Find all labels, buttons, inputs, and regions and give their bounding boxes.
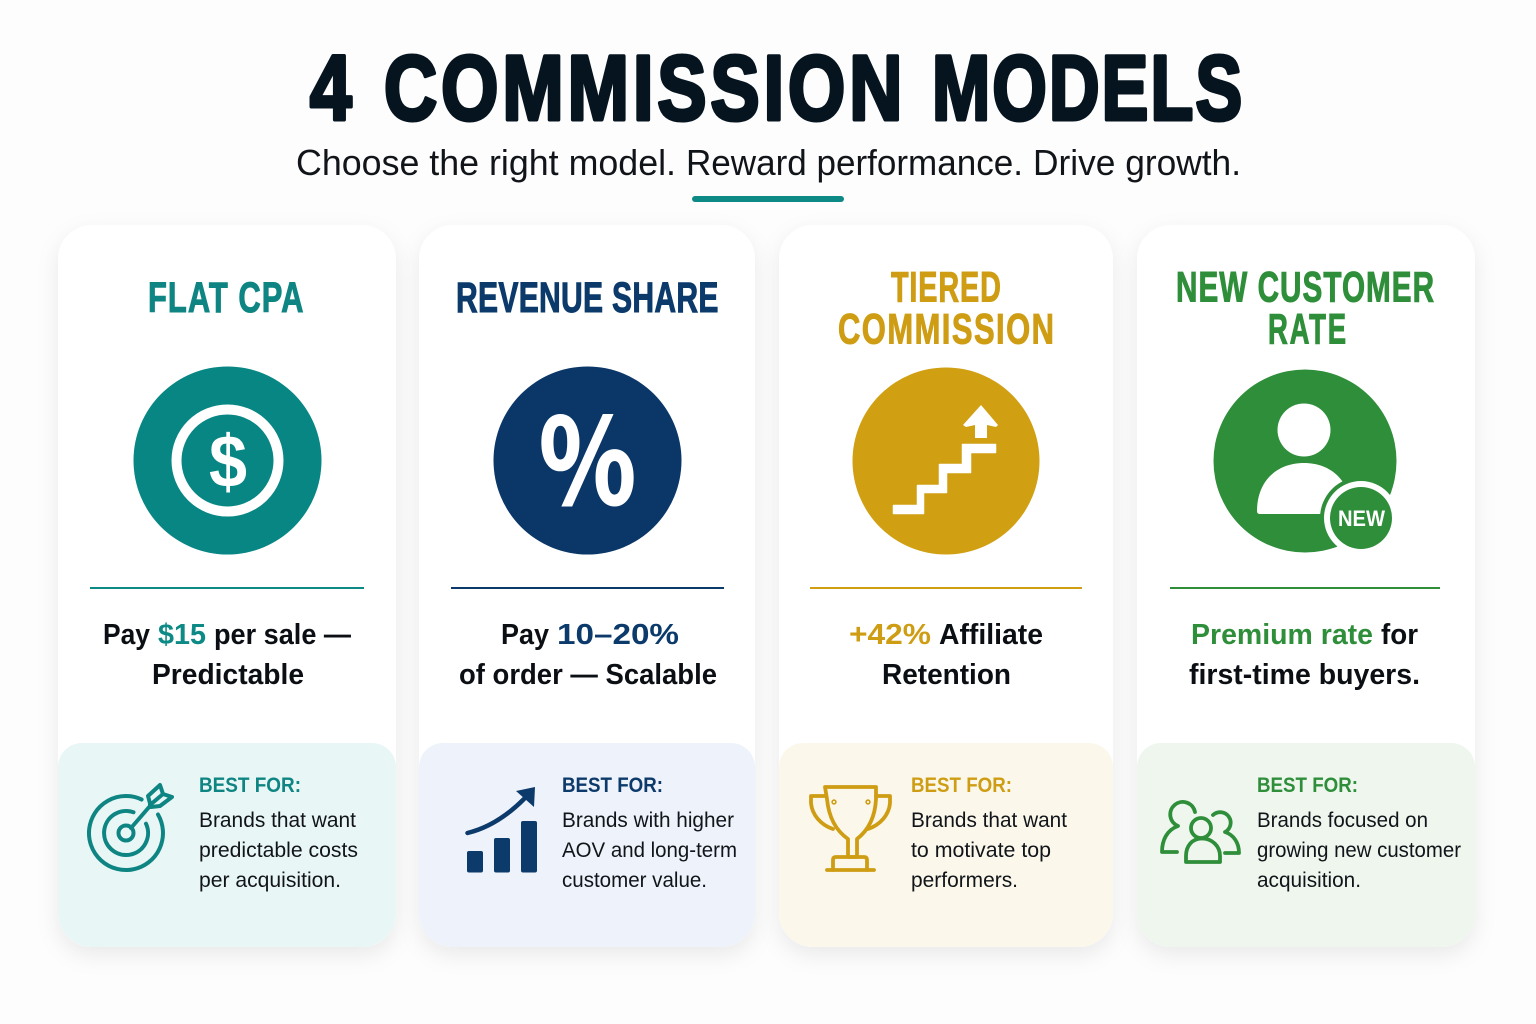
icon: new customer: NEW xyxy=(1338,506,1385,531)
icon: percent xyxy=(494,366,682,554)
heading: tiered commission: TIERED xyxy=(891,263,1001,311)
best-for text: predictable costs xyxy=(199,839,358,862)
best-for text: BEST FOR: xyxy=(911,774,1012,797)
heading: tiered commission: COMMISSION xyxy=(838,304,1054,353)
subtitle: Reward performance. xyxy=(686,142,1023,183)
best-for text: growing new customer xyxy=(1257,839,1461,862)
best-for text: BEST FOR: xyxy=(562,774,663,797)
icon: new customer xyxy=(1214,370,1402,559)
best-for text xyxy=(911,774,1067,892)
offer text: of order — Scalable xyxy=(459,659,717,691)
offer text: per sale — xyxy=(214,619,351,651)
best-for panel xyxy=(58,743,396,947)
title xyxy=(310,37,1242,140)
offer text: Premium rate xyxy=(1191,619,1373,651)
offer text: +42% xyxy=(849,619,931,651)
best-for text: acquisition. xyxy=(1257,869,1361,892)
panel: tiered commission xyxy=(779,225,1113,947)
offer text xyxy=(103,619,351,691)
best-for panel xyxy=(1137,743,1475,947)
icon: target with arrow xyxy=(89,785,172,870)
heading: new customer rate: RATE xyxy=(1268,304,1346,353)
heading: new customer rate: NEW CUSTOMER xyxy=(1176,263,1434,311)
best-for text: customer value. xyxy=(562,869,707,892)
panel: new customer rate xyxy=(1137,225,1475,947)
icon: stairs with arrow xyxy=(852,368,1040,554)
subtitle xyxy=(296,142,1241,183)
best-for text: Brands that want xyxy=(199,809,356,832)
best-for text xyxy=(199,774,358,892)
best-for text xyxy=(562,774,737,892)
heading: new customer rate xyxy=(1176,263,1434,353)
subtitle: Choose the right model. xyxy=(296,142,676,183)
title underline xyxy=(692,196,844,202)
offer text: for xyxy=(1381,619,1418,651)
best-for text: BEST FOR: xyxy=(1257,774,1358,797)
best-for text: performers. xyxy=(911,869,1018,892)
best-for text: Brands focused on xyxy=(1257,809,1428,832)
icon: dollar coin: $ xyxy=(209,420,247,503)
offer text: first-time buyers. xyxy=(1189,659,1420,691)
best-for text: to motivate top xyxy=(911,839,1051,862)
offer text: Predictable xyxy=(152,659,304,691)
offer text: Pay xyxy=(103,619,150,651)
best-for panel xyxy=(779,743,1113,947)
best-for text: BEST FOR: xyxy=(199,774,301,797)
offer text: $15 xyxy=(158,619,206,651)
best-for text: Brands that want xyxy=(911,809,1067,832)
heading: flat cpa: FLAT CPA xyxy=(148,273,304,321)
offer text xyxy=(849,619,1043,691)
offer text xyxy=(459,619,717,691)
icon: percent: % xyxy=(539,367,636,538)
icon: trophy xyxy=(811,787,890,870)
subtitle: Drive growth. xyxy=(1033,142,1241,183)
icon: rising bar chart xyxy=(467,787,537,872)
best-for panel xyxy=(419,743,755,947)
best-for text: Brands with higher xyxy=(562,809,734,832)
title: COMMISSION xyxy=(384,37,902,139)
panel: revenue share xyxy=(419,225,755,947)
offer text: 10–20% xyxy=(557,619,679,651)
offer text: Affiliate xyxy=(939,619,1043,651)
icon: group of people xyxy=(1162,802,1239,862)
title: 4 xyxy=(310,37,352,139)
icon: dollar coin xyxy=(134,366,322,554)
offer text: Retention xyxy=(882,659,1011,691)
offer text: Pay xyxy=(501,619,549,651)
panel: flat cpa xyxy=(58,225,396,947)
best-for text: AOV and long-term xyxy=(562,839,737,862)
heading: revenue share: REVENUE SHARE xyxy=(456,273,718,321)
best-for text: per acquisition. xyxy=(199,869,341,892)
title: MODELS xyxy=(932,37,1242,140)
offer text xyxy=(1189,619,1420,691)
best-for text xyxy=(1257,774,1461,892)
heading: tiered commission xyxy=(838,263,1054,353)
